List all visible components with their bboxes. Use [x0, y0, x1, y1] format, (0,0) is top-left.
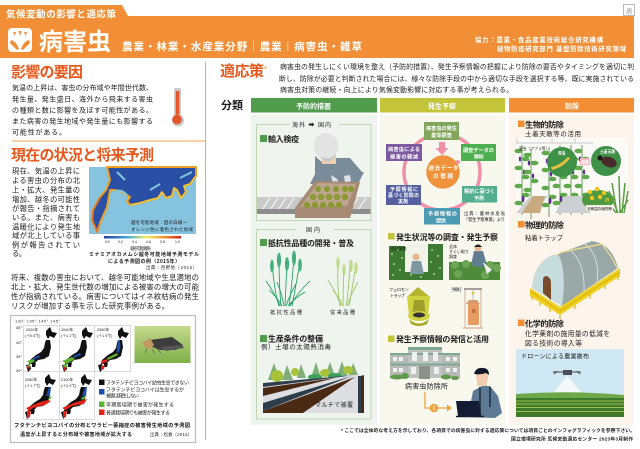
tag: 表 — [624, 4, 634, 16]
illustration: natural enemies in eggplant field: 青虫 — [558, 150, 566, 156]
illustration: light trap — [451, 286, 483, 328]
tag: 表: 表 — [626, 6, 633, 15]
small multiple maps of Japan: (＋1.9℃) — [97, 334, 113, 338]
legend: colour bar — [104, 236, 181, 244]
small multiple maps of Japan: 130° 135° 140° 145° — [15, 318, 60, 324]
caption: leafhopper figure: 出典：松倉（2015） — [150, 431, 192, 438]
map: overwintering prediction: 越冬可能地域：図の白線～ — [131, 219, 188, 226]
diagram: forecasting cycle: 予察情報に — [390, 186, 418, 193]
legend: colour bar: 0.6 — [146, 240, 151, 244]
legend: damage categories: フタテンチビヨコバイは生息するが — [106, 386, 184, 394]
text: current status: 上・拡大、発生量の — [12, 186, 80, 194]
arrow: information flow: ! — [433, 406, 435, 412]
diagram: forecasting cycle: 量等調査 — [431, 131, 453, 139]
panel: 防除: 図る技術の導入等 — [525, 338, 582, 348]
text: adaptation overview: 病害虫対策の継続・向上により気候変動影響に対応する事が考えられる。 — [280, 85, 513, 94]
photo: sweep-net survey: すくい取り — [449, 248, 469, 254]
legend: colour bar: 0.4 — [132, 240, 137, 244]
legend: colour bar: 0.0 — [105, 240, 110, 244]
legend: damage categories: 普通栽培期でも被害が発生する — [106, 410, 170, 416]
illustration: resistant wheat — [266, 250, 310, 306]
text: future projection: 北上・拡大、発生世代数の増加による被害の増大の可能 — [11, 282, 200, 292]
panel: 防除: 物理的防除 — [525, 220, 565, 230]
diagram: forecasting cycle: 過去データ — [428, 164, 459, 172]
small multiple maps of Japan: 2080年 — [25, 377, 37, 382]
small multiple maps of Japan — [15, 318, 130, 420]
map: overwintering prediction: オレンジ色に着色された地域 — [131, 226, 194, 233]
illustration: solar soil disinfection field: マルチで被覆 — [315, 401, 353, 409]
small multiple maps of Japan: 2020年 — [26, 327, 38, 332]
credit: 協力：農業・食品産業技術総合研究機構 — [475, 35, 604, 44]
box: 国内 measures: 抵抗性品種の開発・普及 — [268, 238, 354, 248]
map caption: による予測図の例（2015年） — [108, 258, 180, 265]
box: 国内 measures: 抵抗性品種 — [270, 308, 303, 316]
panel: 予防的措置: 予防的措置 — [296, 102, 331, 110]
header banner — [0, 5, 634, 58]
box: 国内 measures: 生産条件の整備 — [268, 334, 323, 344]
text: future projection — [11, 273, 200, 310]
header tag: series name: 気候変動の影響と適応策 — [6, 8, 116, 20]
legend: damage categories — [99, 380, 189, 416]
text: impact factors: の種類と数に影響を及ぼす可能性がある。 — [12, 106, 153, 114]
panel: 発生予察: 発生予察情報の発信と活用 — [396, 334, 489, 344]
diagram: forecasting cycle: 調査データの — [463, 146, 494, 154]
map: overwintering prediction — [89, 167, 196, 234]
box: 国内 measures — [256, 226, 371, 419]
diagram: forecasting cycle — [386, 122, 506, 224]
map caption — [89, 245, 199, 271]
photo: sweep-net survey — [449, 243, 501, 280]
legend: damage categories: フタテンチビヨコバイ幼虫生息できない — [106, 380, 189, 386]
illustration: natural enemies in eggplant field — [514, 138, 628, 219]
diagram: forecasting cycle: 予察情報の — [428, 210, 457, 218]
text: impact factors — [12, 83, 153, 136]
illustration: light trap: 予察灯 — [451, 286, 463, 293]
box: 国内 measures: 従来品種 — [330, 308, 356, 316]
credit — [475, 35, 627, 53]
diagram: forecasting cycle: 提供 — [436, 216, 447, 224]
text: adaptation overview — [279, 62, 634, 94]
diagram: forecasting cycle: 病害虫による — [388, 145, 420, 153]
text: current status: 温暖化により発生地 — [12, 222, 81, 232]
footnote: * ここでは全体的な考え方を示しており、各項目での病害虫に対する適応策については項目ごとのインフォグラフィックを参照下さい。 — [341, 427, 635, 434]
text: current status: よる害虫の分布の北 — [12, 176, 81, 185]
text: future projection: 性が指摘されている。病害についてはイネ紋枯病の発生 — [11, 292, 199, 301]
panel: 防除: 防除 — [565, 102, 579, 110]
divider: column separator — [12, 62, 206, 440]
label: 病害虫防除所: 病害虫防除所 — [405, 382, 448, 390]
diagram: forecasting cycle: 病害虫の発生 — [426, 124, 457, 132]
arrow: information flow — [425, 392, 452, 412]
text: current status: 例が報告されてい — [12, 240, 80, 250]
footnote: 国立環境研究所 気候変動適応センター 2023年3月制作 — [511, 436, 633, 442]
diagram: forecasting cycle: 予測 — [474, 194, 484, 202]
panel: leafhopper distribution — [10, 316, 196, 442]
text: current status — [12, 166, 81, 258]
illustration: natural enemies in eggplant field: 天敵温存植物等 — [587, 206, 613, 211]
panel: 発生予察: 発生状況等の調査・発生予察 — [396, 232, 498, 242]
text: impact factors: 可能性がある。 — [12, 128, 66, 136]
illustration: pheromone trap: フェロモン — [389, 287, 409, 293]
credit: 植物防疫研究部門 基盤防除技術研究領域 — [497, 44, 627, 53]
photo: sweep-net survey: 調査 — [449, 253, 457, 259]
panel: 発生予察: 発生予察 — [428, 102, 456, 110]
box: 輸入検疫 — [256, 121, 371, 220]
heading: 現在の状況と将来予測: 現在の状況と将来予測 — [11, 146, 154, 164]
subtitle: sectors: 農業・林業・水産業分野｜農業｜病害虫・雑草 — [122, 40, 362, 53]
diagram: forecasting cycle: 解析に基づく — [464, 187, 495, 195]
panel: 防除: 化学的防除 — [525, 318, 565, 328]
illustration: natural enemies in eggplant field: 土着天敵 — [600, 149, 615, 154]
panel: 防除: 生物的防除 — [525, 120, 565, 130]
illustration: person with laptop — [456, 368, 502, 418]
panel: 防除: 粘着トラップ — [525, 233, 564, 242]
diagram: forecasting cycle: 解析 — [474, 152, 485, 160]
text: future projection: 将来、複数の害虫において、越冬可能地域や生息適地の — [11, 273, 199, 282]
panel: 予防的措置 — [251, 98, 377, 425]
map caption: ミナミアオカメムシ越冬可能地域予測モデル — [89, 251, 199, 258]
illustration: plant protection station — [390, 347, 460, 380]
legend: damage categories: 早期栽培期で被害が発生する — [106, 402, 174, 408]
panel: 防除 — [509, 98, 634, 425]
illustration: natural enemies in eggplant field: 害虫（アブラ等） — [519, 146, 549, 151]
heading: 適応策: * — [264, 65, 267, 74]
box: 国内 measures: 国内 — [306, 226, 320, 234]
text: current status: 現在、気温の上昇に — [12, 166, 80, 176]
illustration: sticky trap greenhouse — [530, 241, 620, 319]
diagram: forecasting cycle: 実施 — [398, 198, 408, 205]
icon: insects — [8, 28, 32, 52]
footnote — [341, 427, 635, 442]
text: current status: いる。また、病害も — [12, 213, 80, 222]
box: 国内 measures: 例）土壌の太陽熱消毒 — [261, 342, 332, 351]
diagram: forecasting cycle: 被害の軽減 — [390, 152, 419, 160]
caption: leafhopper figure: フタテンチビヨコバイの分布とワラビー萎縮症の被害発生地域の予測図 — [14, 421, 190, 429]
text: impact factors: 気温の上昇は、害虫の分布域や年間世代数、 — [12, 83, 153, 92]
icon: thermometer — [172, 88, 184, 126]
caption: leafhopper figure — [14, 421, 192, 438]
photo: field survey: 巡回調査 — [390, 245, 406, 251]
label: 分類: 分類 — [221, 98, 243, 112]
legend: colour bar: 0.2 — [118, 240, 123, 244]
text: impact factors: 発生量、発生盛日、海外から飛来する害虫 — [12, 94, 153, 104]
diagram: forecasting cycle: 基づく防除の — [388, 192, 419, 199]
legend: colour bar: 0.8 — [160, 240, 165, 244]
text: impact factors: また病害の発生地域や発生量にも影響する — [12, 116, 153, 126]
text: adaptation overview: 病害虫の発生しにくい環境を整え（予防的措置）、発生予察情報の把握により防除の要否やタイミングを適切に判 — [280, 62, 634, 71]
illustration: drone spraying field — [516, 349, 624, 417]
illustration: natural enemies in eggplant field: 捕食 — [581, 158, 589, 164]
photo: sweep-net survey: 全体 — [449, 243, 457, 249]
panel: 防除: 化学薬剤の施用量の低減を — [525, 329, 610, 338]
text: future projection: リスクが増加する事を示した研究事例がある。 — [11, 302, 169, 310]
small multiple maps of Japan: (＋2.4℃) — [61, 384, 77, 388]
text: current status: る。 — [12, 249, 26, 258]
diagram: forecasting cycle: 出典：農林水産省 — [464, 210, 506, 217]
box: 輸入検疫: 輸入検疫 — [268, 134, 299, 144]
illustration: pheromone trap: トラップ — [390, 293, 406, 299]
map caption: 越冬可能確率 — [130, 245, 152, 252]
caption: leafhopper figure: 温度が上昇すると分布域や被害地域が拡大する — [20, 431, 132, 438]
small multiple maps of Japan: 2100年 — [61, 377, 73, 382]
legend: colour bar: 1.0 — [175, 240, 180, 244]
photo: field survey — [389, 244, 443, 280]
small multiple maps of Japan: 30° — [16, 368, 22, 373]
illustration: drone spraying field: ドローンによる農業散布 — [521, 352, 589, 360]
illustration: inspector and fruit crate — [257, 133, 370, 218]
box: 輸入検疫: 海外 ➡ 国内 — [292, 121, 331, 129]
small multiple maps of Japan: 40° — [16, 340, 22, 345]
heading: 適応策: 適応策 — [220, 62, 264, 80]
panel: 防除: 土着天敵等の活用 — [525, 129, 581, 138]
small multiple maps of Japan: 2040年 — [61, 327, 73, 332]
diagram: forecasting cycle: 「発生予察事業」より — [464, 216, 505, 223]
illustration: pheromone trap — [389, 287, 430, 326]
text: current status: 域が北上している事 — [12, 231, 80, 240]
heading: 影響の要因: 影響の要因 — [11, 63, 83, 81]
small multiple maps of Japan: 2060年 — [97, 327, 109, 332]
small multiple maps of Japan: (＋1.7℃) — [25, 384, 41, 388]
text: current status: 増加、越冬の可能性 — [12, 195, 80, 204]
photo: leafhopper — [134, 326, 190, 363]
small multiple maps of Japan: (＋0.6℃) — [25, 334, 41, 338]
small multiple maps of Japan: (＋1.1℃) — [61, 334, 77, 338]
legend: damage categories: 被害は発生しない — [106, 392, 139, 400]
map caption: 出典：西野他（2016） — [146, 264, 197, 271]
text: current status: が報告・指摘されて — [12, 204, 80, 213]
small multiple maps of Japan: 45° — [16, 325, 22, 330]
text: adaptation overview: 断し、防除が必要と判断された場合には、様々な防除手段の中から適切な手段を選択する等、既に実施されている — [279, 74, 634, 83]
illustration: conventional wheat — [328, 257, 358, 306]
panel: 発生予察 — [380, 98, 506, 425]
small multiple maps of Japan: 35° — [16, 354, 22, 359]
title: 病害虫: 病害虫 — [39, 29, 111, 56]
illustration: solar soil disinfection field — [263, 361, 364, 413]
diagram: forecasting cycle: の蓄積 — [433, 172, 453, 180]
